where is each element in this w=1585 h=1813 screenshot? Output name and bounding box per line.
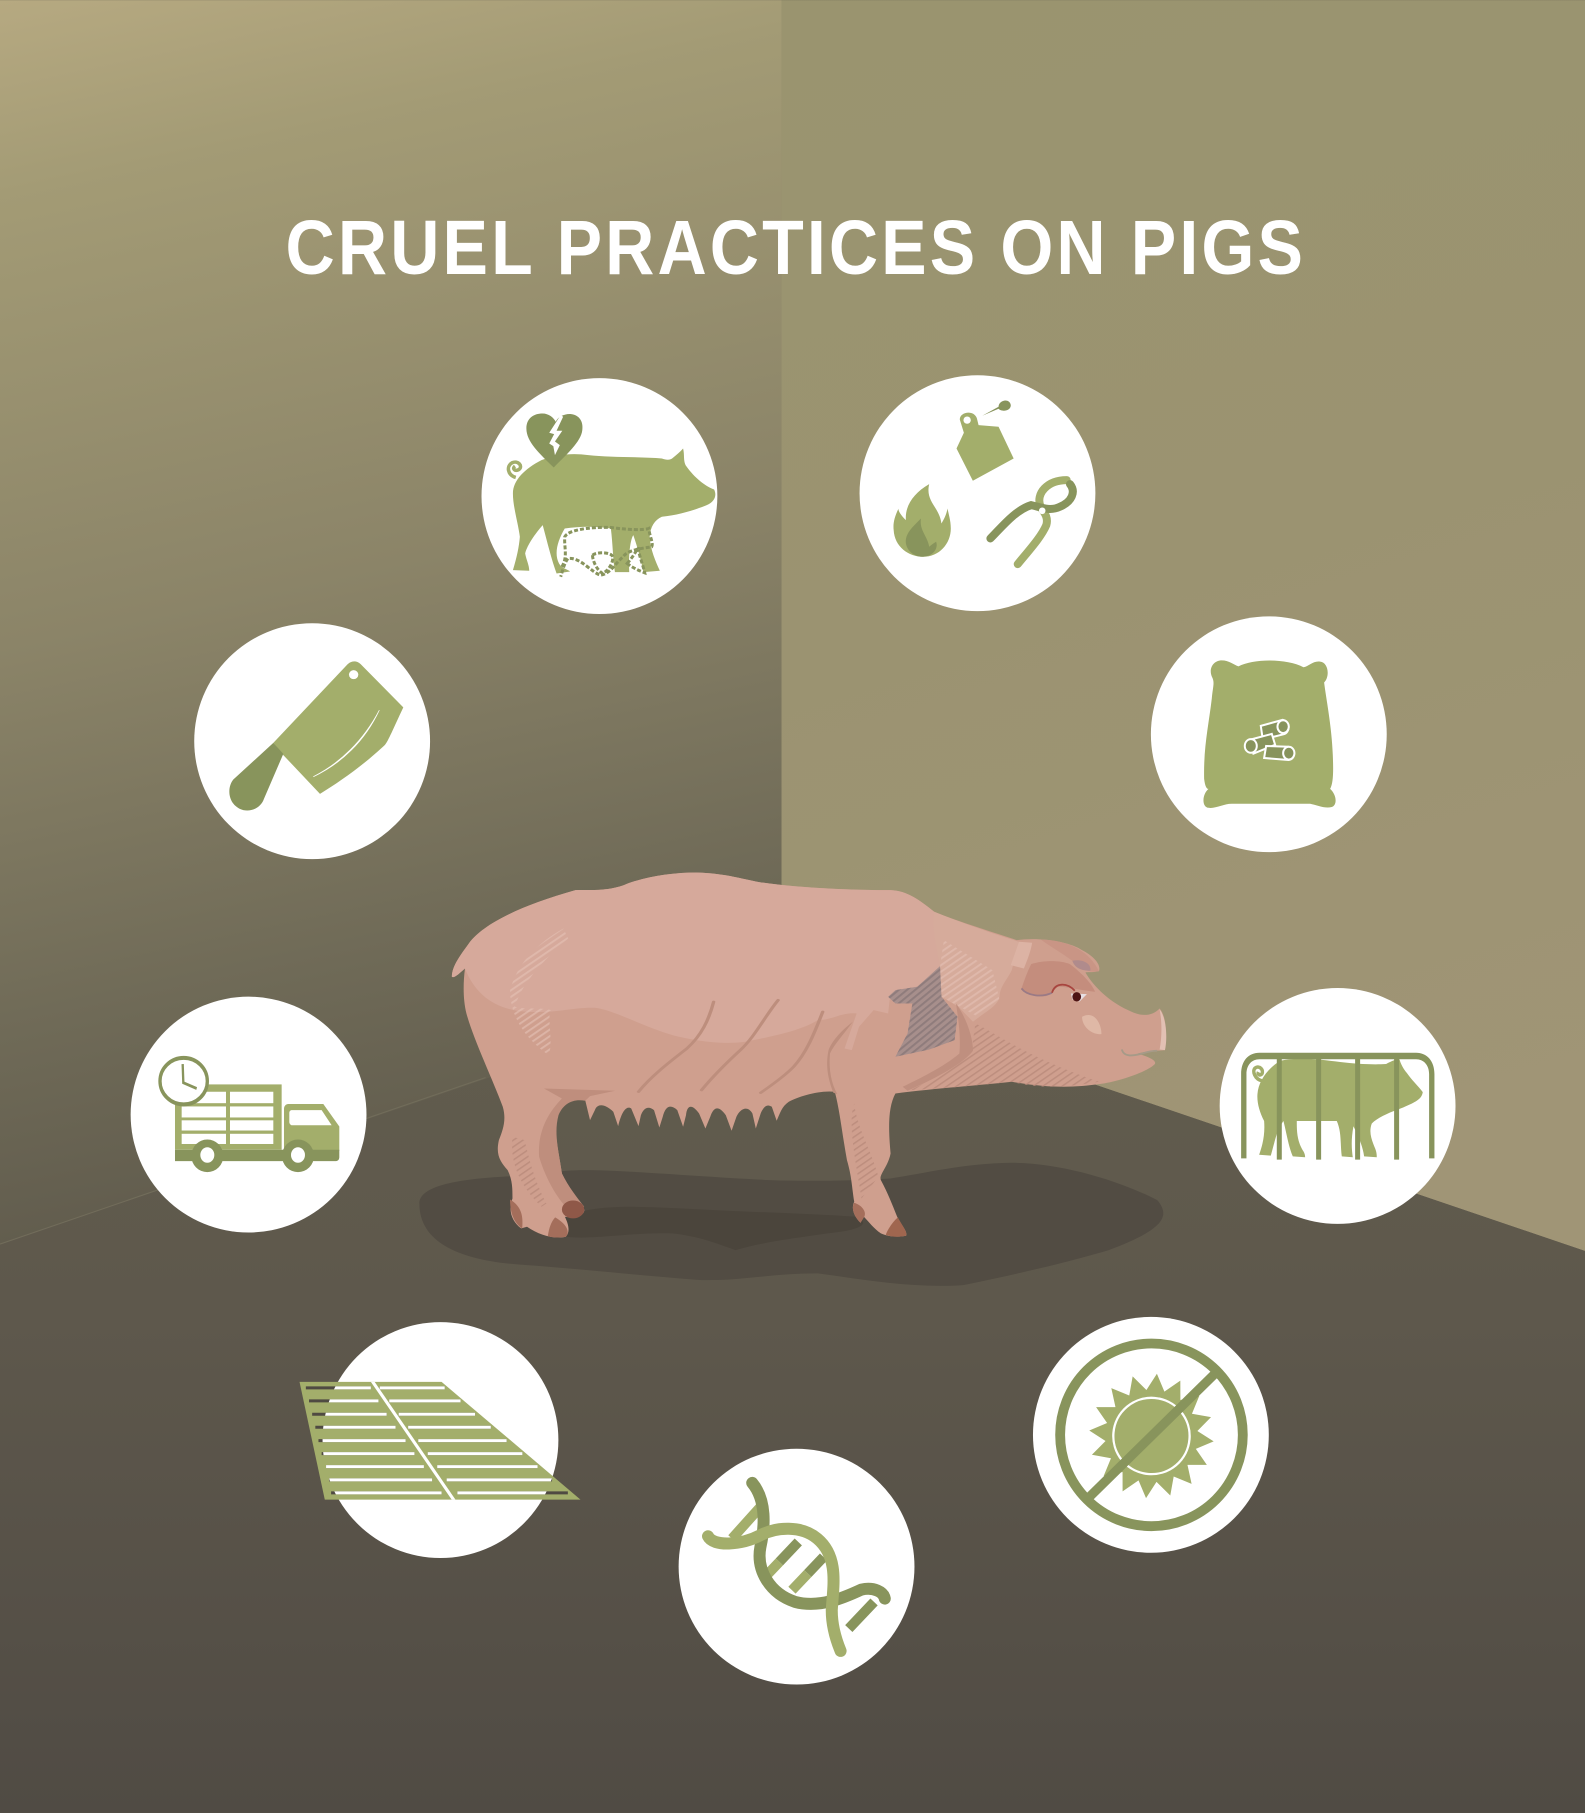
white circle xyxy=(860,375,1095,611)
tag pin xyxy=(982,400,1011,416)
dashed piglets xyxy=(561,527,652,577)
white circle xyxy=(482,378,717,614)
white circle xyxy=(194,623,430,859)
background: right wall xyxy=(782,0,1585,1251)
hind leg shading and udder xyxy=(539,1088,615,1207)
icon: DNA xyxy=(708,1483,885,1651)
icon: truck xyxy=(160,1058,339,1172)
handle xyxy=(229,743,283,811)
panel: long transport (truck with clock) xyxy=(131,997,366,1233)
title: CRUEL PRACTICES ON PIGS xyxy=(286,205,1303,291)
panel: separation from sow (broken heart and piglets) xyxy=(482,378,717,614)
panel: mutilations (ear tag, branding, teeth pliers) xyxy=(860,375,1095,611)
cage bars xyxy=(1241,1053,1434,1158)
panel: sow stall (pig behind bars) xyxy=(1220,988,1456,1224)
icon: feed sack xyxy=(1203,660,1336,808)
panel: slatted floor xyxy=(300,1322,580,1558)
neck fold xyxy=(903,1003,973,1091)
shoulder fold xyxy=(827,1022,853,1094)
panel: genetic selection (DNA helix) xyxy=(679,1449,914,1685)
background: floor xyxy=(0,978,1585,1813)
hatching: rump and neck xyxy=(510,928,568,1055)
grey patch wound xyxy=(888,966,957,1057)
white circle xyxy=(131,997,366,1233)
sack xyxy=(1203,660,1336,808)
neck highlight xyxy=(934,912,1019,1022)
background: left wall xyxy=(0,0,782,1244)
icon: pig with broken heart xyxy=(508,413,715,577)
white circle xyxy=(323,1322,558,1558)
body wrinkles xyxy=(639,1000,823,1093)
icon: prohibition sign xyxy=(1060,1344,1243,1526)
pig body xyxy=(452,872,1166,1238)
white circle xyxy=(1151,616,1387,852)
cheek highlight and snout xyxy=(1082,1015,1101,1034)
panel: no sunlight (sun with prohibition sign) xyxy=(1033,1317,1269,1553)
pig tail xyxy=(508,462,521,477)
pig silhouette xyxy=(1257,1059,1423,1157)
truck base xyxy=(175,1150,339,1161)
icon: slatted floor grate xyxy=(300,1382,580,1500)
ear xyxy=(1041,939,1099,972)
icon: cleaver xyxy=(229,661,403,811)
wheels xyxy=(191,1139,223,1172)
icon: sun xyxy=(1084,1368,1219,1504)
icon: caged pig xyxy=(1241,1053,1434,1160)
clock xyxy=(160,1058,207,1104)
eye and brow xyxy=(1021,985,1087,1001)
central pig illustration with shadow xyxy=(419,872,1166,1286)
pig silhouette xyxy=(513,448,715,573)
white circle xyxy=(679,1449,914,1685)
truck crate xyxy=(175,1084,282,1150)
panel: unnatural feed (sack of pellets) xyxy=(1151,616,1387,852)
truck cab xyxy=(284,1104,339,1151)
broken heart xyxy=(526,413,583,467)
upper body highlight xyxy=(452,872,944,1050)
hooves xyxy=(510,1199,522,1228)
white circle xyxy=(1033,1317,1269,1553)
blade xyxy=(273,661,403,794)
pig shadow xyxy=(419,1163,1163,1286)
ear tag xyxy=(957,413,1014,481)
panel: slaughter (cleaver) xyxy=(194,623,430,859)
icon: tag, flame and pliers xyxy=(893,400,1073,564)
pliers xyxy=(990,480,1073,564)
rungs xyxy=(732,1507,874,1629)
flame xyxy=(893,484,951,557)
pellets xyxy=(1245,720,1294,760)
white circle xyxy=(1220,988,1456,1224)
